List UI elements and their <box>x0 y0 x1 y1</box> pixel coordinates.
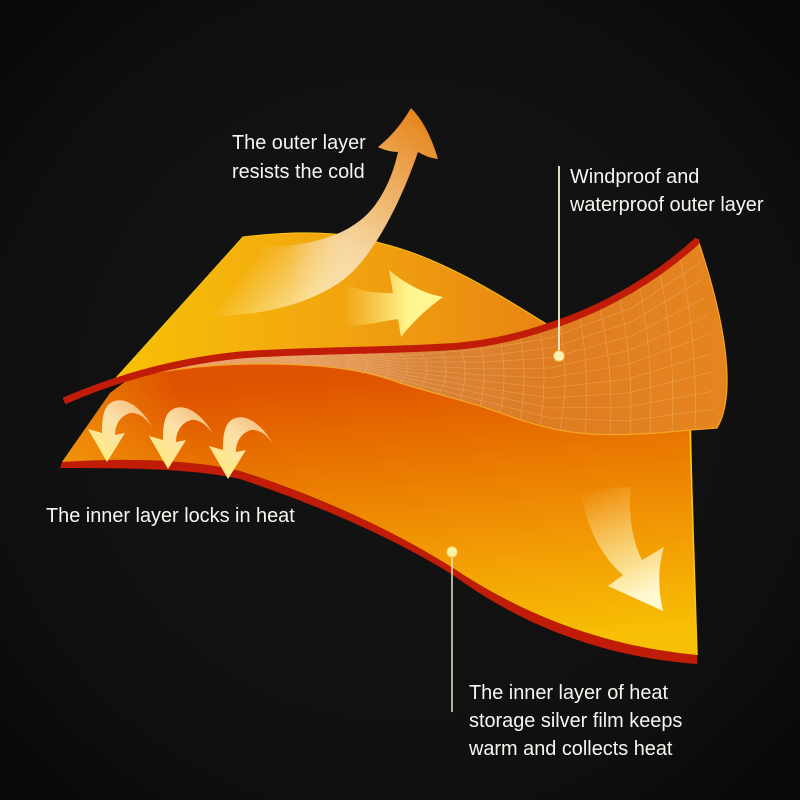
panel: mesh outer layer <box>64 240 727 435</box>
text: outer layer resists cold: resists the cold <box>232 161 365 183</box>
mesh grid lines <box>345 257 715 435</box>
mesh fabric surface <box>103 240 727 435</box>
text: inner layer silver film: warm and collects heat <box>468 738 673 760</box>
panel: inner heat storage layer <box>60 340 697 664</box>
arrow: heat reflected 3 <box>209 417 273 479</box>
text: outer layer resists cold: The outer layer <box>232 132 366 154</box>
inner layer orange surface <box>62 340 697 655</box>
arrow: heat rising through outer layer <box>210 108 438 316</box>
text: inner layer silver film: storage silver film keeps <box>469 710 682 732</box>
panel: top yellow heat layer <box>116 233 550 382</box>
inner layer right edge <box>690 430 697 655</box>
callout: windproof pointer <box>554 166 564 362</box>
inner layer left highlight <box>62 360 260 471</box>
callout: inner film pointer <box>446 546 458 712</box>
arrow: heat collected downward <box>582 487 664 611</box>
arrow: heat moving right <box>343 270 443 337</box>
text: windproof and waterproof: waterproof outer layer <box>569 194 764 216</box>
text: inner layer locks in heat: The inner layer locks in heat <box>46 505 295 527</box>
red binding band <box>64 240 698 401</box>
text: inner layer silver film: The inner layer of heat <box>469 682 668 704</box>
arrow: heat reflected 1 <box>88 400 152 462</box>
inner layer red edge <box>60 460 697 664</box>
arrow: heat reflected 2 <box>149 407 213 469</box>
text: windproof and waterproof: Windproof and <box>570 166 699 188</box>
